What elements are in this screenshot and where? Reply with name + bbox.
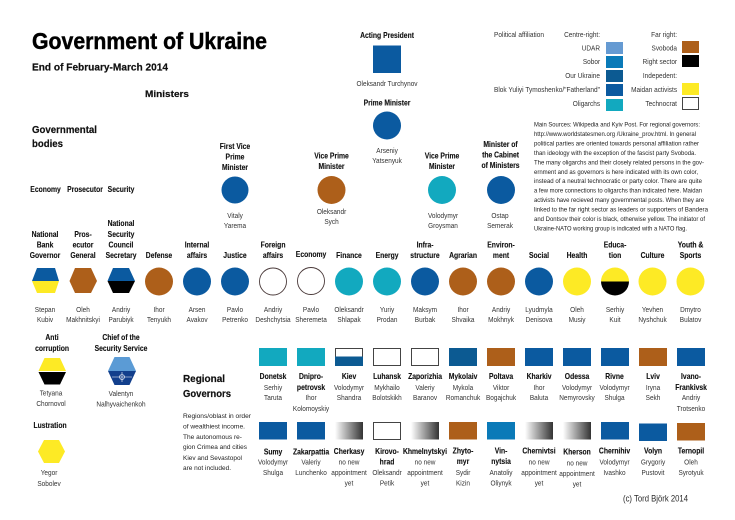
- panel: vice prime minister groysman: Groysman: [428, 223, 458, 230]
- minister: social: [525, 250, 553, 324]
- governor: zhytomyr: Zhyto-: [453, 446, 474, 456]
- minister: education: tion: [609, 250, 622, 260]
- minister: internal affairs: [183, 240, 211, 324]
- governor: kiev: Shandra: [337, 395, 361, 402]
- text block: sources and notes: activists have recieved many governmental posts. When they are: [534, 197, 704, 204]
- governor: khmelnytskyi: appointment: [407, 470, 443, 477]
- minister: agrarian: Ihor: [457, 307, 469, 314]
- body: national security council secretary: Security: [108, 229, 135, 239]
- governor: vinnytsia: nytsia: [491, 456, 512, 466]
- body: prosecutor general: ecutor: [73, 240, 93, 250]
- governor: cherkasy: Cherkasy: [334, 446, 365, 456]
- governor: kharkiv: Baluta: [530, 395, 548, 402]
- minister: education: Serhiy: [606, 307, 625, 314]
- minister: economy: Economy: [296, 249, 327, 259]
- legend: political affiliation: Right sector: [643, 59, 678, 66]
- governor: dnipropetrovsk: Dnipro-: [299, 371, 324, 381]
- heading: ministers: Ministers: [145, 89, 189, 100]
- minister: foreign affairs: Andriy: [264, 307, 283, 314]
- minister: education: Educa-: [604, 240, 627, 250]
- governor: zaporizhia: [408, 348, 443, 402]
- minister: environment: [487, 240, 515, 324]
- text block: sources and notes: and Dontsov their color is black, otherwise yellow. The initiator of: [534, 216, 705, 223]
- governor: zakarpattia: Lunchenko: [295, 470, 327, 477]
- legend: political affiliation: Far right:: [651, 32, 677, 39]
- governor: zhytomyr: Kizin: [456, 480, 470, 488]
- governor: khmelnytskyi: [403, 422, 447, 488]
- minister: foreign affairs: Deshchytsia: [255, 317, 291, 324]
- body: anti corruption: Chornovol: [36, 401, 66, 408]
- governor: cherkasy: [331, 422, 367, 488]
- text block: sources and notes: Ukraine-NATO working group is indicated with a NATO flag.: [534, 226, 687, 232]
- text block: regional note: Regions/oblast in order: [183, 413, 252, 420]
- governor: kharkiv: Ihor: [533, 385, 545, 392]
- governor: zhytomyr: [449, 422, 477, 488]
- governor: kharkiv: Kharkiv: [527, 371, 552, 381]
- governor: donetsk: [259, 348, 287, 402]
- minister: health: [563, 250, 591, 324]
- credit: (c) Tord Björk 2014: [623, 494, 688, 504]
- minister: culture: [638, 250, 667, 324]
- governor: cherkasy: no new: [339, 459, 360, 467]
- text block: sources and notes: Main Sources: Wikipedia and Kyiv Post. For regional governors:: [534, 122, 700, 128]
- governor: chernivtsi: appointment: [521, 470, 557, 477]
- body: national bank governor: Bank: [37, 240, 54, 250]
- governor: odessa: Odessa: [565, 371, 590, 381]
- heading: regional governors: Governors: [183, 388, 231, 400]
- governor: lviv: [639, 348, 667, 402]
- panel: vice prime minister groysman: Volodymyr: [428, 213, 459, 220]
- governor: kharkiv: [525, 348, 553, 402]
- governor: vinnytsia: [487, 422, 515, 488]
- minister: youth and sports: Dmytro: [680, 307, 701, 314]
- minister: health: Musiy: [569, 317, 586, 324]
- governor: khmelnytskyi: Khmelnytskyi: [403, 446, 447, 456]
- minister: social: Denisova: [526, 317, 553, 324]
- governor: luhansk: Mykhailo: [374, 385, 400, 392]
- panel: minister of the cabinet: Minister of: [483, 139, 518, 149]
- panel: prime minister: Arseniy: [376, 148, 398, 155]
- panel: first vice prime minister: [220, 141, 250, 230]
- body: chief of the security service: Valentyn: [109, 391, 133, 398]
- governor: volyn: Volyn: [644, 446, 662, 456]
- minister: energy: Prodan: [377, 317, 397, 324]
- governor: ternopil: Oleh: [684, 459, 698, 467]
- panel: minister of the cabinet: [481, 139, 520, 230]
- legend: political affiliation: Sobor: [583, 59, 601, 66]
- minister: social: Social: [529, 250, 549, 260]
- minister: education: Kuit: [609, 317, 621, 324]
- heading: governmental bodies: bodies: [32, 138, 63, 150]
- minister: agrarian: Shvaika: [452, 317, 475, 324]
- governor: rivne: Rivne: [605, 371, 624, 381]
- body: anti corruption: Anti: [45, 332, 59, 342]
- minister: infrastructure: Maksym: [413, 307, 437, 314]
- body: chief of the security service: Chief of the: [102, 332, 140, 342]
- minister: economy: Sheremeta: [295, 317, 327, 324]
- body: lustration: Yegor: [41, 470, 58, 477]
- panel: minister of the cabinet: the Cabinet: [482, 150, 519, 160]
- legend: political affiliation: Maidan activists: [631, 87, 678, 94]
- governor: volyn: Grygoriy: [641, 459, 666, 467]
- governor: chernivtsi: yet: [535, 480, 543, 488]
- text block: regional note: Kiev and Sevastopol: [183, 455, 242, 462]
- governor: zakarpattia: [293, 422, 330, 477]
- governor: mykolaiv: Mykolaiv: [449, 371, 478, 381]
- minister: foreign affairs: Foreign: [261, 240, 286, 250]
- governor: odessa: Volodymyr: [562, 385, 593, 392]
- body: national bank governor: Stepan: [35, 307, 55, 314]
- panel: vice prime minister sych: [314, 151, 349, 226]
- minister: infrastructure: Infra-: [417, 240, 434, 250]
- governor: volyn: Pustovit: [642, 470, 665, 477]
- panel: vice prime minister sych: Sych: [324, 219, 339, 226]
- minister: health: Health: [567, 250, 588, 260]
- panel: first vice prime minister: Yarema: [224, 223, 246, 230]
- governor: khmelnytskyi: yet: [421, 480, 429, 488]
- governor: rivne: [599, 348, 630, 402]
- heading: regional governors: [183, 373, 231, 400]
- governor: sumy: Sumy: [264, 447, 283, 457]
- text block: sources and notes: linked to the far right sector as leaders or supporters of Bandera: [534, 207, 708, 214]
- governor: cherkasy: appointment: [331, 470, 367, 477]
- minister: education: [601, 240, 629, 324]
- panel: vice prime minister sych: Oleksandr: [317, 209, 347, 216]
- governor: cherkasy: yet: [345, 480, 353, 488]
- governor: kherson: Kherson: [563, 447, 591, 457]
- body: national security council secretary: Council: [109, 240, 133, 250]
- governor: zakarpattia: Zakarpattia: [293, 447, 330, 457]
- governor: vinnytsia: Anatoliy: [490, 470, 513, 477]
- governor: kirovohrad: Petik: [380, 480, 395, 488]
- panel: prime minister: Yatsenyuk: [372, 158, 402, 165]
- governor: zaporizhia: Valeriy: [415, 385, 435, 392]
- panel: first vice prime minister: Prime: [226, 152, 244, 162]
- minister: defense: Defense: [146, 250, 172, 260]
- legend: political affiliation: Centre-right:: [564, 32, 600, 39]
- governor: chernihiv: Volodymyr: [599, 459, 630, 467]
- governor: ternopil: Syrotyuk: [678, 470, 704, 477]
- governor: odessa: Nemyrovsky: [559, 395, 595, 402]
- governor: kiev: [334, 348, 365, 402]
- minister: defense: Tenyukh: [147, 317, 171, 324]
- legend: political affiliation: Blok Yuliyi Tymoshenko/"Fatherland": [494, 85, 600, 94]
- minister: internal affairs: affairs: [187, 250, 207, 260]
- minister: infrastructure: structure: [410, 250, 440, 260]
- governor: khmelnytskyi: no new: [415, 459, 436, 467]
- body: lustration: Sobolev: [37, 481, 61, 488]
- body: prosecutor general: Makhnitskyi: [66, 317, 100, 324]
- minister: justice: [221, 250, 249, 324]
- governor: lviv: Iryna: [646, 385, 660, 392]
- governor: zaporizhia: Zaporizhia: [408, 371, 443, 381]
- body: prosecutor general: [66, 229, 100, 324]
- governor: ternopil: [677, 423, 705, 477]
- body: anti corruption: corruption: [35, 343, 69, 353]
- body: lustration: Lustration: [33, 420, 67, 430]
- governor: ivano-frankivsk: Trotsenko: [677, 406, 705, 413]
- text block: regional note: are not included.: [183, 465, 231, 472]
- minister: youth and sports: Bulatov: [680, 317, 702, 324]
- legend: political affiliation: Our Ukraine: [565, 73, 600, 80]
- text block: sources and notes: ernment and as governors is here indicated with its own color,: [534, 169, 698, 176]
- minister: social: Lyudmyla: [525, 307, 553, 314]
- governor: ivano-frankivsk: Ivano-: [681, 371, 702, 381]
- legend: political affiliation: Oligarchs: [573, 101, 601, 108]
- governmental body categories: Economy: [30, 184, 62, 194]
- governor: sumy: Volodymyr: [258, 459, 289, 467]
- governor: dnipropetrovsk: petrovsk: [297, 382, 326, 392]
- minister: internal affairs: Arsen: [189, 307, 206, 314]
- governor: ivano-frankivsk: Frankivsk: [675, 382, 708, 392]
- governor: kherson: appointment: [559, 471, 595, 478]
- minister: environment: Andriy: [492, 307, 511, 314]
- body: national bank governor: National: [32, 229, 58, 239]
- body: national security council secretary: [106, 218, 137, 324]
- text block: regional note: The autonomous re-: [183, 434, 242, 441]
- governor: chernihiv: [599, 422, 631, 477]
- minister: defense: Ihor: [153, 307, 165, 314]
- text block: regional note: of wealthiest income.: [183, 424, 245, 430]
- minister: culture: Culture: [641, 250, 664, 260]
- panel: prime minister: Prime Minister: [364, 98, 410, 108]
- governmental body categories: Prosecutor: [67, 184, 103, 194]
- panel: minister of the cabinet: Semerak: [487, 223, 513, 230]
- text block: sources and notes: instead of a neutral technocratic or party color. There are quite: [534, 178, 702, 185]
- governor: donetsk: Serhiy: [264, 385, 283, 392]
- panel: vice prime minister sych: Vice Prime: [314, 151, 349, 161]
- governor: lviv: Sekh: [646, 395, 660, 402]
- governor: luhansk: [372, 348, 402, 402]
- panel: acting president: Acting President: [360, 30, 414, 40]
- body: anti corruption: [35, 332, 69, 408]
- body: national bank governor: Governor: [30, 250, 60, 260]
- governor: kirovohrad: [372, 422, 402, 488]
- body: prosecutor general: Pros-: [74, 229, 92, 239]
- minister: agrarian: Agrarian: [449, 250, 477, 260]
- governor: zhytomyr: Sydir: [456, 470, 471, 477]
- minister: energy: Energy: [376, 250, 399, 260]
- governor: ivano-frankivsk: [675, 348, 708, 413]
- governor: lviv: Lviv: [646, 371, 661, 381]
- legend: political affiliation: Indepedent:: [643, 73, 677, 80]
- body: prosecutor general: Oleh: [76, 307, 90, 314]
- governor: luhansk: Luhansk: [373, 371, 402, 381]
- governor: ternopil: Ternopil: [678, 446, 704, 456]
- text block: sources and notes: a few more connections to oligarchs than indicated here. Maidan: [534, 188, 702, 195]
- panel: vice prime minister groysman: Vice Prime: [425, 151, 459, 161]
- minister: youth and sports: Youth &: [678, 240, 704, 250]
- governor: rivne: Shulga: [604, 395, 625, 402]
- minister: justice: Petrenko: [222, 317, 248, 324]
- minister: justice: Justice: [223, 250, 247, 260]
- heading: regional governors: Regional: [183, 373, 225, 385]
- heading: governmental bodies: Governmental: [32, 124, 97, 136]
- governor: mykolaiv: [446, 348, 481, 402]
- body: chief of the security service: Security Service: [95, 343, 147, 353]
- governor: luhansk: Bolotskikh: [372, 395, 402, 402]
- governor: volyn: [639, 424, 667, 477]
- governor: kirovohrad: Oleksandr: [372, 470, 402, 477]
- minister: youth and sports: Sports: [680, 250, 701, 260]
- governor: odessa: [559, 348, 595, 402]
- governor: poltava: Bogajchuk: [486, 395, 517, 402]
- minister: energy: [373, 250, 401, 324]
- panel: vice prime minister sych: Minister: [318, 161, 345, 171]
- governor: donetsk: Donetsk: [260, 371, 287, 381]
- body: prosecutor general: General: [70, 250, 96, 260]
- body: national security council secretary: National: [108, 218, 134, 228]
- governor: sumy: Shulga: [263, 470, 283, 477]
- minister: foreign affairs: affairs: [263, 250, 283, 260]
- governor: kiev: Kiev: [342, 371, 357, 381]
- text block: sources and notes: The many oligarchs and their closely related persons in the gov-: [534, 159, 704, 166]
- minister: environment: Environ-: [487, 240, 515, 250]
- governor: kirovohrad: Kirovo-: [375, 446, 399, 456]
- governor: donetsk: Taruta: [264, 395, 282, 402]
- heading: governmental bodies: [32, 124, 97, 150]
- text block: sources and notes: than ideology with the exception of the fascist party Svoboda.: [534, 150, 696, 157]
- panel: vice prime minister groysman: [425, 151, 459, 230]
- body: national bank governor: Kubiv: [37, 317, 54, 324]
- minister: environment: ment: [493, 250, 510, 260]
- text block: sources and notes: http://www.worldstatesmen.org /Ukraine_prov.html. In general: [534, 131, 696, 138]
- governor: kirovohrad: hrad: [380, 457, 395, 467]
- governor: kherson: no new: [567, 460, 588, 468]
- body: national security council secretary: Secretary: [106, 250, 137, 260]
- title: Government of Ukraine: [32, 28, 267, 54]
- minister: environment: Mokhnyk: [488, 317, 514, 324]
- body: lustration: [33, 420, 67, 488]
- panel: minister of the cabinet: Ostap: [491, 213, 509, 220]
- governor: mykolaiv: Mykola: [453, 385, 473, 392]
- minister: finance: Shlapak: [337, 317, 361, 324]
- governor: chernivtsi: [521, 422, 557, 488]
- panel: minister of the cabinet: of Ministers: [481, 160, 520, 170]
- panel: prime minister: [364, 98, 410, 165]
- governor: sumy: [258, 422, 289, 477]
- body: national security council secretary: Parubiyk: [108, 317, 134, 324]
- governor: dnipropetrovsk: Ihor: [305, 395, 317, 402]
- governor: poltava: Viktor: [493, 385, 510, 392]
- governor: mykolaiv: Romanchuk: [446, 395, 481, 402]
- governmental body categories: Security: [108, 184, 135, 194]
- panel: first vice prime minister: First Vice: [220, 141, 250, 151]
- governor: chernihiv: Ivashko: [603, 470, 626, 477]
- panel: first vice prime minister: Vitaly: [227, 213, 243, 220]
- legend: political affiliation: [494, 30, 699, 111]
- minister: economy: Pavlo: [303, 307, 319, 314]
- governor: kherson: yet: [573, 481, 581, 489]
- panel: acting president: Oleksandr Turchynov: [357, 81, 418, 88]
- minister: finance: Oleksandr: [334, 307, 364, 314]
- panel: first vice prime minister: Minister: [222, 162, 248, 172]
- minister: energy: Yuriy: [380, 307, 395, 314]
- governor: dnipropetrovsk: Kolomoyskiy: [293, 406, 330, 413]
- minister: internal affairs: Avakov: [187, 317, 208, 324]
- governor: dnipropetrovsk: [293, 348, 330, 413]
- minister: health: Oleh: [570, 307, 584, 314]
- panel: acting president: [357, 30, 418, 88]
- governor: zaporizhia: Baranov: [413, 395, 437, 402]
- minister: finance: Finance: [336, 250, 362, 260]
- minister: culture: Nyshchuk: [638, 317, 667, 324]
- minister: economy: [295, 249, 327, 324]
- governor: kiev: Volodymyr: [334, 385, 365, 392]
- body: chief of the security service: [95, 332, 147, 409]
- governor: zhytomyr: myr: [457, 456, 469, 466]
- minister: agrarian: [449, 250, 477, 324]
- governor: poltava: [486, 348, 517, 402]
- governor: chernihiv: Chernihiv: [599, 446, 631, 456]
- minister: culture: Yevhen: [642, 307, 663, 314]
- body: national security council secretary: Andriy: [112, 307, 131, 314]
- governor: zakarpattia: Valeriy: [301, 459, 321, 467]
- panel: vice prime minister groysman: Minister: [429, 161, 455, 171]
- text block: sources and notes: political parties are oriented towards personal affiliation rather: [534, 140, 700, 147]
- governor: poltava: Poltava: [489, 371, 514, 381]
- governor: rivne: Volodymyr: [599, 385, 630, 392]
- legend: political affiliation: Political affiliation: [494, 30, 544, 39]
- minister: defense: [145, 250, 173, 324]
- legend: political affiliation: Svoboda: [652, 45, 677, 53]
- governor: chernivtsi: Chernivtsi: [522, 446, 556, 456]
- governor: vinnytsia: Vin-: [495, 446, 508, 456]
- minister: foreign affairs: [255, 240, 291, 324]
- minister: internal affairs: Internal: [185, 240, 209, 250]
- minister: youth and sports: [676, 240, 704, 324]
- governor: chernivtsi: no new: [529, 459, 550, 467]
- governor: ivano-frankivsk: Andriy: [682, 395, 701, 402]
- text block: regional note: gion Crimea and cities: [183, 444, 248, 451]
- text block: sources and notes: [534, 122, 708, 232]
- body: chief of the security service: Nalhyvaichenkoh: [96, 401, 146, 409]
- body: national bank governor: [30, 229, 62, 324]
- minister: justice: Pavlo: [227, 307, 243, 314]
- governor: vinnytsia: Oliynyk: [490, 480, 512, 488]
- governmental body categories: [30, 184, 135, 194]
- minister: infrastructure: Burbak: [415, 317, 436, 324]
- body: anti corruption: Tetyana: [40, 390, 62, 398]
- governor: kherson: [559, 422, 595, 489]
- legend: political affiliation: Technocrat: [645, 101, 677, 108]
- subtitle: End of February-March 2014: [32, 62, 168, 74]
- minister: finance: [334, 250, 364, 324]
- text block: regional note: [183, 413, 252, 472]
- minister: infrastructure: [410, 240, 440, 324]
- legend: political affiliation: UDAR: [582, 45, 600, 53]
